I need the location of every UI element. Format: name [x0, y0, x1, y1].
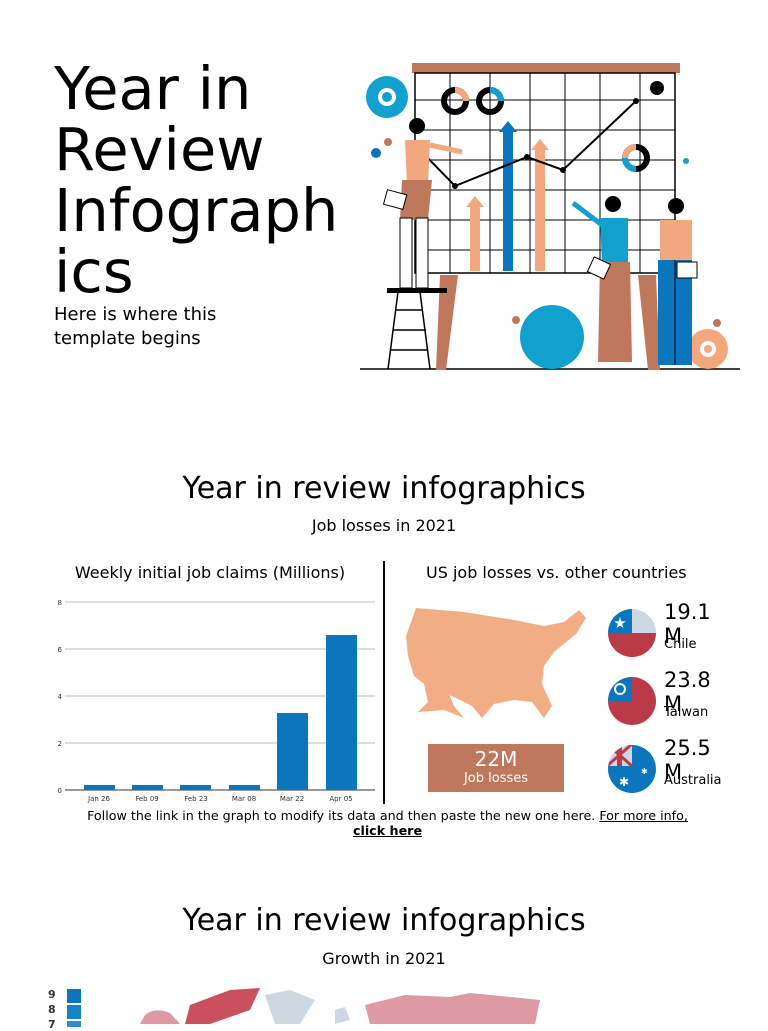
illustration: presentation board with people: [360, 63, 740, 370]
section 1 heading: Year in review infographics: [182, 471, 586, 506]
callout: 22M job losses: [428, 744, 564, 792]
callout: 22M job losses: Job losses: [464, 771, 528, 786]
item: Taiwan: 23.8: [664, 668, 711, 692]
panel: US vs other countries: [406, 563, 722, 793]
bar chart: Jan 26: [87, 795, 111, 803]
bar chart: 6: [58, 646, 63, 654]
item: Australia: Australia: [664, 773, 722, 788]
item: Australia: M: [664, 760, 682, 784]
bar chart: [58, 599, 375, 803]
bar chart: Feb 09: [135, 795, 159, 803]
legend scale: 9: [48, 988, 56, 1001]
bar chart: 0: [58, 787, 62, 795]
bar chart: 4: [58, 693, 63, 701]
title: Year in: [54, 54, 251, 123]
chart title: Weekly initial job claims (Millions): [75, 563, 345, 582]
item: Chile: [608, 600, 711, 657]
icon: US map: [406, 608, 586, 718]
subtitle: template begins: [54, 328, 201, 349]
footnote: click here: [353, 823, 422, 838]
bar chart: Apr 05: [329, 795, 353, 803]
world map: [140, 988, 540, 1024]
item: Australia: ✱: [619, 775, 629, 789]
legend scale: 8: [48, 1003, 56, 1016]
bar chart: 2: [58, 740, 62, 748]
panel: bar chart: [58, 563, 375, 803]
item: Chile: Chile: [664, 637, 697, 652]
panel title: US job losses vs. other countries: [426, 563, 687, 582]
bar chart: Feb 23: [184, 795, 208, 803]
item: Chile: 19.1: [664, 600, 711, 624]
bar chart: 8: [58, 599, 62, 607]
item: Taiwan: [608, 668, 711, 725]
section 2 heading: Year in review infographics: [182, 903, 586, 938]
footnote: [87, 808, 688, 838]
section 2 subheading: Growth in 2021: [322, 949, 446, 968]
item: Taiwan: M: [664, 692, 682, 716]
divider: [383, 561, 385, 804]
item: Australia: [608, 736, 722, 793]
item: Australia: 25.5: [664, 736, 711, 760]
item: Chile: ★: [613, 614, 627, 632]
bar chart: Mar 08: [232, 795, 256, 803]
text: 7: [48, 1018, 56, 1031]
title: Infograph: [54, 176, 338, 245]
title: Review: [54, 115, 265, 184]
item: Australia: ✱: [641, 767, 648, 776]
callout: 22M job losses: 22M: [475, 747, 517, 771]
item: Chile: M: [664, 624, 682, 648]
legend scale: [48, 988, 81, 1031]
bar chart: Mar 22: [280, 795, 304, 803]
item: Taiwan: Taiwan: [664, 705, 708, 720]
title: [54, 54, 338, 306]
subtitle: [54, 304, 216, 349]
title: ics: [54, 237, 134, 306]
section 1 subheading: Job losses in 2021: [312, 516, 456, 535]
footnote: Follow the link in the graph to modify its data and then paste the new one here. For more info,: [87, 808, 688, 823]
subtitle: Here is where this: [54, 304, 216, 325]
